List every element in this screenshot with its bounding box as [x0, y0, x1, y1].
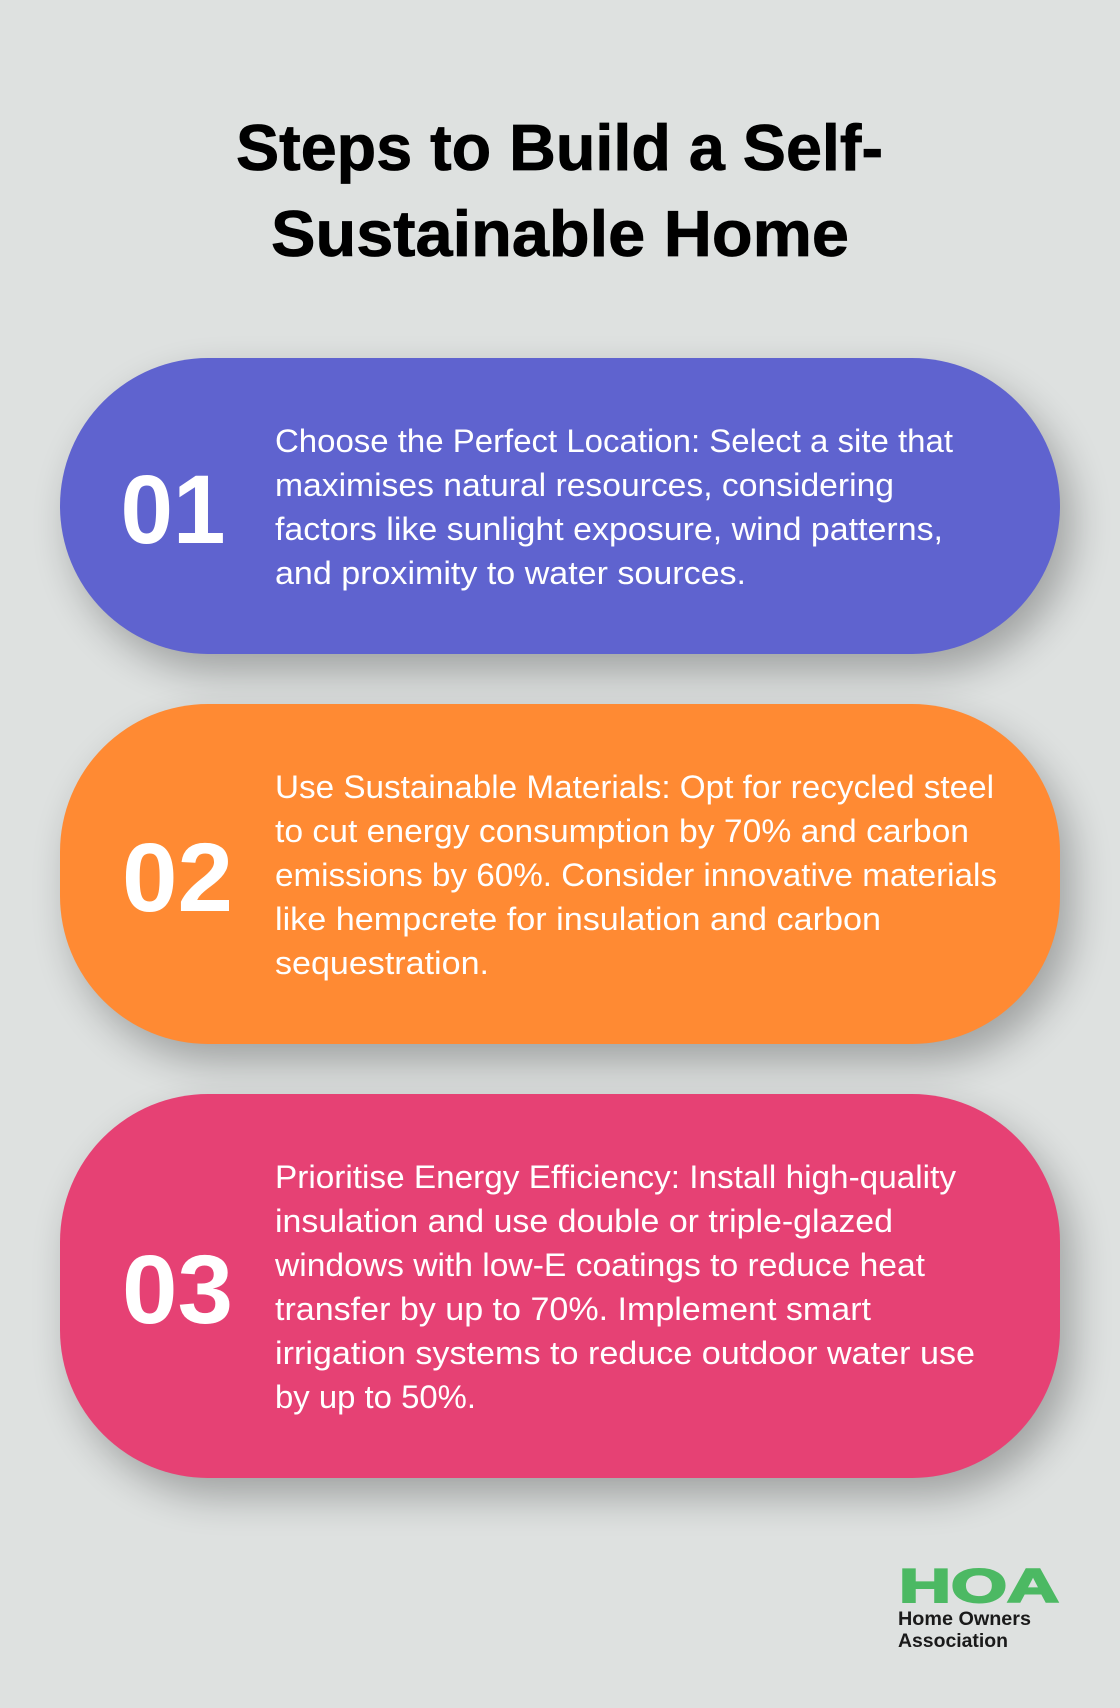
- step 2 text: emissions by 60%. Consider innovative materials: [275, 857, 997, 893]
- panel: step 3: [60, 1094, 1072, 1496]
- logo: Home Owners Association: HOA: [899, 1559, 1059, 1612]
- step 2 text: [275, 769, 997, 981]
- step 2 text: Use Sustainable Materials: Opt for recycled steel: [275, 769, 994, 805]
- panel: step 2: [60, 704, 1072, 1062]
- step 2 text: sequestration.: [275, 945, 489, 981]
- step 1 text: [275, 423, 953, 591]
- step number 03: 03: [122, 1235, 233, 1344]
- step 3 text: irrigation systems to reduce outdoor water use: [275, 1335, 975, 1371]
- step 1 text: factors like sunlight exposure, wind patterns,: [275, 511, 943, 547]
- title: [236, 111, 883, 270]
- step 3 text: insulation and use double or triple-glazed: [275, 1203, 893, 1239]
- logo: Home Owners Association: Home Owners: [898, 1609, 1031, 1630]
- title: Steps to Build a Self-: [236, 111, 883, 184]
- title: Sustainable Home: [271, 197, 849, 270]
- step 1 text: maximises natural resources, considering: [275, 467, 894, 503]
- step number 01: 01: [120, 455, 226, 564]
- step 3 text: Prioritise Energy Efficiency: Install high-quality: [275, 1159, 957, 1195]
- step 2 text: like hempcrete for insulation and carbon: [275, 901, 881, 937]
- step 2 text: to cut energy consumption by 70% and carbon: [275, 813, 969, 849]
- step number 02: 02: [122, 823, 233, 932]
- logo: Home Owners Association: Association: [898, 1631, 1008, 1652]
- panel: step 1: [60, 358, 1072, 672]
- step 1 text: Choose the Perfect Location: Select a site that: [275, 423, 953, 459]
- step 1 text: and proximity to water sources.: [275, 555, 746, 591]
- logo: Home Owners Association: [898, 1559, 1059, 1652]
- step 3 text: by up to 50%.: [275, 1379, 476, 1415]
- step 3 text: [274, 1159, 975, 1415]
- step 3 text: windows with low-E coatings to reduce heat: [274, 1247, 925, 1283]
- step 3 text: transfer by up to 70%. Implement smart: [275, 1291, 871, 1327]
